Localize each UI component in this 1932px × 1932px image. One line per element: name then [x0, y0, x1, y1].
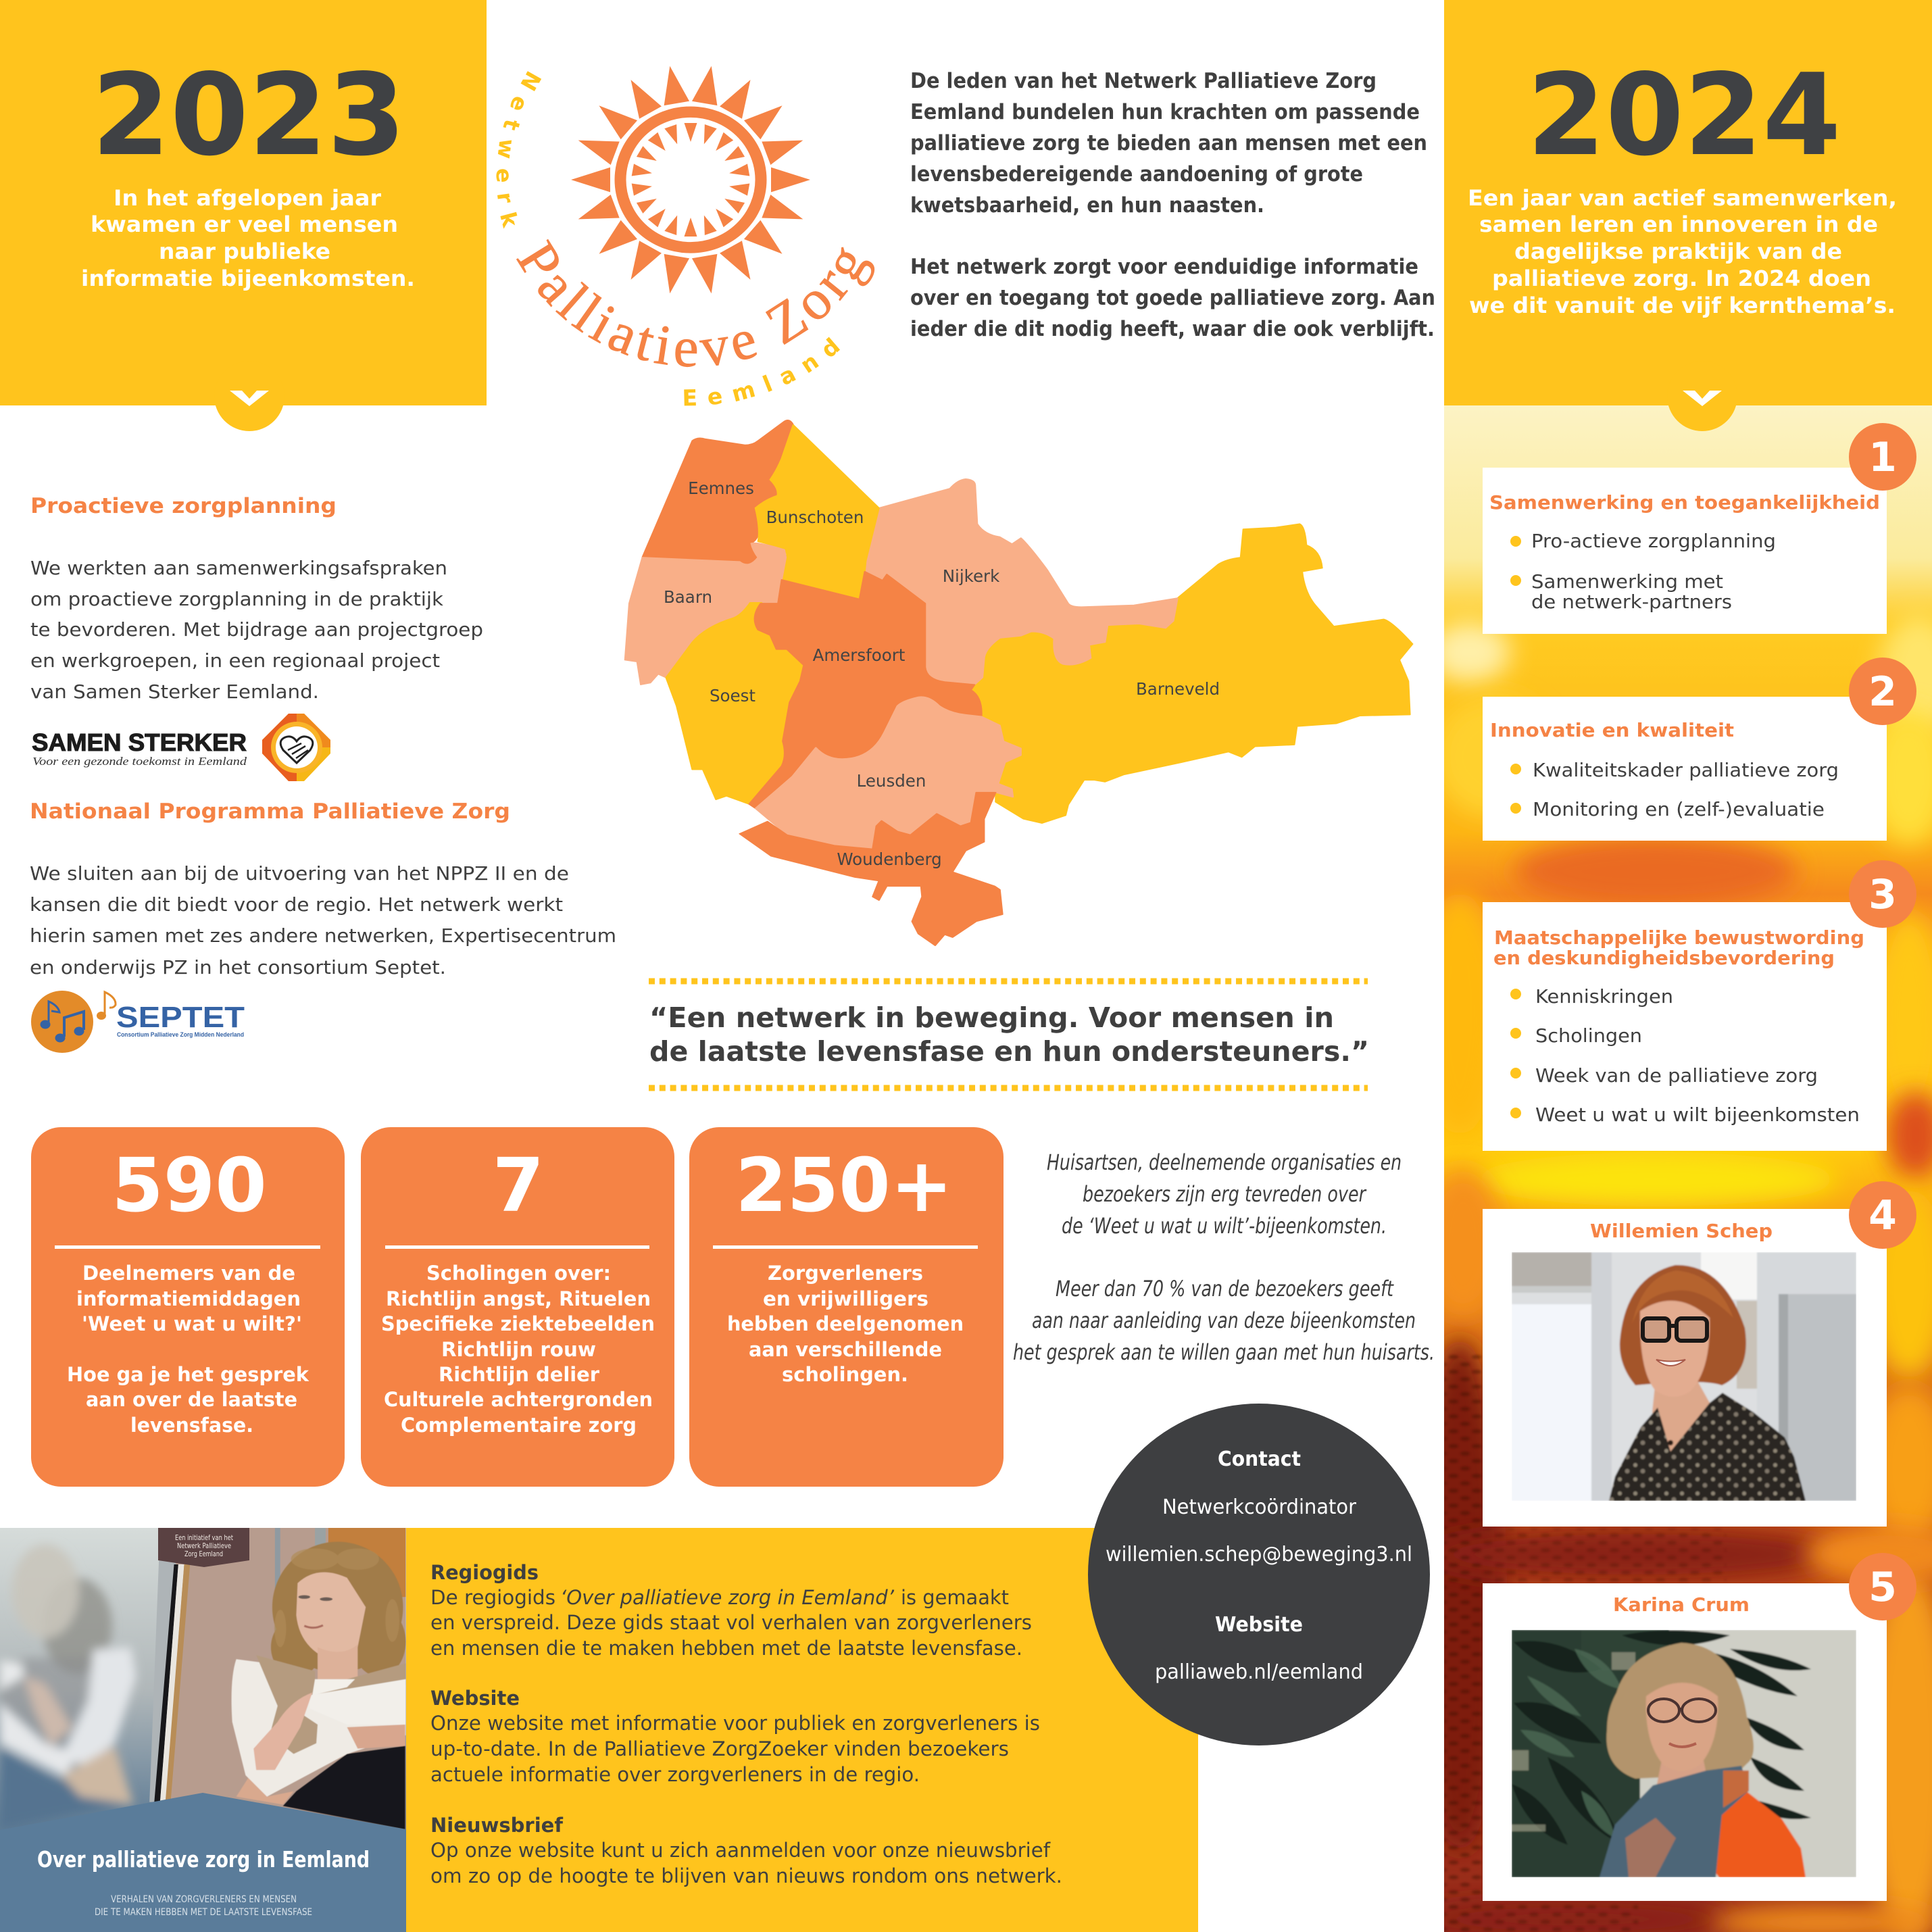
- municipality: Eemnes: [643, 420, 793, 569]
- card 5: Karina Crum: [1483, 1583, 1887, 1901]
- text: NPPZ paragraph: [30, 862, 616, 979]
- text: stat 250+ description: Zorgverleners: [768, 1262, 923, 1285]
- text: Website: Onze website met informatie voor publiek en zorgverleners is: [430, 1712, 1040, 1735]
- text: Website: [430, 1687, 1040, 1786]
- text: satisfaction statement: de ‘Weet u wat u wilt’-bijeenkomsten.: [1062, 1213, 1387, 1239]
- map labels: Eemnes: [688, 478, 754, 498]
- text: 2023 intro: informatie bijeenkomsten.: [81, 266, 415, 291]
- text: Regiogids: [430, 1561, 1032, 1660]
- text: 2023 intro: [81, 185, 415, 291]
- logo text: Netwerk: Netwerk: [496, 71, 542, 228]
- icon: sun: [571, 64, 810, 295]
- text: Nieuwsbrief: om zo op de hoogte te blijven van nieuws rondom ons netwerk.: [430, 1864, 1062, 1887]
- card 3: Maatschappelijke bewustwording: Maatschappelijke bewustwording: [1494, 926, 1864, 949]
- text: 2024 intro: dagelijkse praktijk van de: [1514, 239, 1842, 264]
- scarf: [1600, 1766, 1749, 1877]
- text: stat 590 description: levensfase.: [130, 1414, 253, 1437]
- card 3: Maatschappelijke bewustwording: Kenniskringen: [1535, 985, 1673, 1008]
- text: proactieve zorgplanning paragraph: [30, 557, 483, 703]
- shirt: [1609, 1393, 1806, 1501]
- badge 4: 4: [1868, 1192, 1897, 1239]
- photo: Karina Crum: [1512, 1630, 1856, 1877]
- card 5: Karina Crum: Karina Crum: [1613, 1593, 1750, 1616]
- text: satisfaction statement: het gesprek aan te willen gaan met hun huisarts.: [1013, 1339, 1435, 1365]
- text: Nieuwsbrief: [430, 1814, 1062, 1887]
- badge 3: [1849, 860, 1916, 928]
- text: stat 7 description: Specifieke ziektebeelden: [381, 1312, 655, 1335]
- text: 2024 intro: we dit vanuit de vijf kernthema’s.: [1469, 293, 1896, 318]
- municipality: Barneveld: [971, 524, 1412, 823]
- text: NPPZ paragraph: hierin samen met zes andere netwerken, Expertisecentrum: [30, 924, 616, 947]
- banner: brown tag: Zorg Eemland: [184, 1550, 223, 1558]
- logo text: Eemland: Eemland: [684, 337, 840, 405]
- text: stat 250+ description: en vrijwilligers: [763, 1287, 928, 1310]
- number: 590: 590: [112, 1142, 267, 1229]
- panel: contact circle: Netwerkcoördinator: [1162, 1495, 1357, 1519]
- number: 7: 7: [493, 1142, 544, 1229]
- logo: Samen Sterker: [32, 714, 330, 781]
- logo: Septet: Consortium Palliatieve Zorg Midden Nederland: [117, 1031, 244, 1038]
- card 2: Innovatie en kwaliteit: Innovatie en kwaliteit: [1490, 719, 1734, 741]
- logo: Samen Sterker: SAMEN STERKER: [32, 728, 247, 756]
- text: stat 250+ description: hebben deelgenomen: [727, 1312, 964, 1335]
- text: 2023 intro: kwamen er veel mensen: [91, 212, 398, 237]
- badge 1: 1: [1868, 434, 1897, 481]
- card 3: Maatschappelijke bewustwording: Scholingen: [1535, 1024, 1642, 1047]
- text: proactieve zorgplanning paragraph: en werkgroepen, in een regionaal project: [30, 649, 440, 672]
- text: stat 590 description: Deelnemers van de: [82, 1262, 295, 1285]
- reflection: [0, 1544, 136, 1829]
- smile: [1656, 1360, 1685, 1366]
- text: NPPZ paragraph: kansen die dit biedt voor de regio. Het netwerk werkt: [30, 893, 563, 916]
- icon: chevron down 2024: [1683, 391, 1722, 406]
- map labels: Soest: [710, 686, 756, 705]
- eyes: [299, 1595, 310, 1599]
- panel: right column flower photo background: [1412, 405, 1932, 1932]
- card 3: Maatschappelijke bewustwording: [1483, 902, 1887, 1151]
- panel: stat 7: [361, 1127, 674, 1487]
- text: stat 590 description: Hoe ga je het gesprek: [67, 1363, 309, 1386]
- face: [1640, 1301, 1710, 1397]
- text: stat 590 description: aan over de laatste: [86, 1388, 297, 1411]
- badge 5: 5: [1868, 1564, 1897, 1611]
- text: stat 7 description: Culturele achtergronden: [384, 1388, 653, 1411]
- logo text: Palliatieve Zorg: Palliatieve Zorg: [516, 239, 874, 368]
- municipality: Baarn: [625, 543, 786, 685]
- map labels: Bunschoten: [766, 507, 864, 527]
- card 1: Samenwerking en toegankelijkheid: [1483, 468, 1887, 634]
- text: satisfaction statement: Huisartsen, deelnemende organisaties en: [1047, 1149, 1402, 1175]
- text: satisfaction statement: [1013, 1149, 1435, 1365]
- text: network introduction: over en toegang tot goede palliatieve zorg. Aan: [910, 286, 1435, 310]
- text: 2023 intro: naar publieke: [159, 239, 330, 264]
- panel: 2024 header: [1444, 0, 1932, 431]
- text: Regiogids: is gemaakt: [901, 1586, 1009, 1609]
- hair: [1620, 1265, 1746, 1385]
- text: network introduction: kwetsbaarheid, en hun naasten.: [910, 193, 1264, 218]
- text: stat 7 description: Complementaire zorg: [401, 1414, 637, 1437]
- logo: Samen Sterker: Voor een gezonde toekomst in Eemland: [32, 755, 247, 768]
- banner: blue title block: Over palliatieve zorg in Eemland: [37, 1846, 370, 1873]
- heading: 2023: 2023: [92, 50, 405, 181]
- hair: [1606, 1643, 1754, 1779]
- text: proactieve zorgplanning paragraph: We werkten aan samenwerkingsafspraken: [30, 557, 447, 579]
- municipality: Soest: [666, 603, 803, 804]
- text: NPPZ paragraph: en onderwijs PZ in het consortium Septet.: [30, 956, 446, 979]
- badge 1: [1849, 423, 1916, 491]
- panel: communication channels: [405, 1528, 1198, 1932]
- card 3: Maatschappelijke bewustwording: en deskundigheidsbevordering: [1493, 947, 1835, 969]
- number: 250+: 250+: [735, 1142, 953, 1229]
- text: stat 7 description: Scholingen over:: [426, 1262, 611, 1285]
- wall behind window: [171, 1528, 405, 1829]
- heading: 2024: 2024: [1527, 50, 1841, 181]
- text: NPPZ paragraph: We sluiten aan bij de uitvoering van het NPPZ II en de: [30, 862, 569, 885]
- sweater: [1659, 1792, 1806, 1877]
- necklace: [1668, 1440, 1673, 1445]
- municipality: Bunschoten: [756, 425, 879, 599]
- text: stat 590 description: 'Weet u wat u wilt?': [82, 1312, 302, 1335]
- text: network introduction: De leden van het Netwerk Palliatieve Zorg: [910, 69, 1377, 93]
- panel: contact circle: palliaweb.nl/eemland: [1155, 1660, 1363, 1684]
- text: satisfaction statement: bezoekers zijn erg tevreden over: [1083, 1181, 1366, 1207]
- glasses: [1643, 1318, 1707, 1341]
- card 4: Willemien Schep: [1483, 1209, 1887, 1527]
- map labels: Barneveld: [1136, 679, 1220, 699]
- badge 2: 2: [1868, 668, 1897, 716]
- banner: blue title block: [38, 1793, 405, 1915]
- text: network introduction: Eemland bundelen hun krachten om passende: [910, 100, 1420, 124]
- card 3: Maatschappelijke bewustwording: Weet u wat u wilt bijeenkomsten: [1535, 1104, 1860, 1126]
- text: Regiogids: ‘Over palliatieve zorg in Eemland’: [560, 1586, 895, 1609]
- text: stat 590 description: informatiemiddagen: [76, 1287, 301, 1310]
- panel: 2023 header: [0, 0, 487, 431]
- text: stat 7 description: Richtlijn rouw: [441, 1338, 596, 1361]
- text: Nieuwsbrief: Nieuwsbrief: [430, 1814, 563, 1837]
- municipality: Leusden: [756, 697, 1021, 849]
- text: 2024 intro: palliatieve zorg. In 2024 doen: [1492, 266, 1871, 291]
- map labels: Baarn: [664, 587, 712, 607]
- map labels: Leusden: [857, 771, 926, 791]
- map labels: Amersfoort: [813, 645, 906, 665]
- text: Regiogids: De regiogids: [430, 1586, 555, 1609]
- glasses: [1648, 1699, 1716, 1722]
- heading: Nationaal Programma Palliatieve Zorg: Nationaal Programma Palliatieve Zorg: [30, 799, 510, 824]
- woman portrait on cover: [232, 1541, 405, 1829]
- text: network introduction: ieder die dit nodig heeft, waar die ook verblijft.: [910, 317, 1435, 341]
- icon: handshake heart emblem: [262, 714, 330, 781]
- badge 4: [1849, 1181, 1916, 1249]
- text: stat 590 description: [67, 1262, 309, 1437]
- banner: brown tag: Netwerk Palliatieve: [177, 1541, 231, 1550]
- text: network introduction: Het netwerk zorgt voor eenduidige informatie: [910, 255, 1418, 279]
- text: stat 7 description: Richtlijn angst, Rituelen: [386, 1287, 651, 1310]
- map labels: Woudenberg: [837, 849, 942, 869]
- icon: chevron down 2023: [230, 391, 269, 406]
- text: proactieve zorgplanning paragraph: van Samen Sterker Eemland.: [30, 680, 319, 703]
- panel: contact circle: Website: [1215, 1613, 1303, 1637]
- text: proactieve zorgplanning paragraph: om proactieve zorgplanning in de praktijk: [30, 588, 444, 610]
- text: Regiogids: Regiogids: [430, 1561, 539, 1584]
- text: satisfaction statement: aan naar aanleiding van deze bijeenkomsten: [1032, 1308, 1416, 1333]
- banner: blue title block: VERHALEN VAN ZORGVERLENERS EN MENSEN: [111, 1894, 297, 1905]
- text: Regiogids: en mensen die te maken hebben met de laatste levensfase.: [430, 1637, 1022, 1660]
- map: municipalities of Eemland: [625, 420, 1412, 945]
- badge 3: 3: [1868, 871, 1897, 918]
- badge 2: [1849, 658, 1916, 725]
- card 1: Samenwerking en toegankelijkheid: Pro-actieve zorgplanning: [1531, 530, 1776, 552]
- text: Regiogids: en verspreid. Deze gids staat vol verhalen van zorgverleners: [430, 1611, 1032, 1634]
- text: proactieve zorgplanning paragraph: te bevorderen. Met bijdrage aan projectgroep: [30, 618, 483, 641]
- logo: Septet: SEPTET: [116, 1001, 245, 1034]
- text: stat 250+ description: [727, 1262, 964, 1386]
- text: Nieuwsbrief: Op onze website kunt u zich aanmelden voor onze nieuwsbrief: [430, 1839, 1051, 1862]
- card 1: Samenwerking en toegankelijkheid: Samenwerking en toegankelijkheid: [1489, 491, 1880, 514]
- card 3: Maatschappelijke bewustwording: Week van de palliatieve zorg: [1535, 1064, 1818, 1087]
- neck: [1656, 1757, 1710, 1791]
- callout: quote: “Een netwerk in beweging. Voor mensen in: [649, 1001, 1334, 1034]
- badge 5: [1849, 1553, 1916, 1620]
- municipality: Amersfoort: [749, 572, 982, 808]
- neck: [1652, 1379, 1710, 1453]
- text: Website: actuele informatie over zorgverleners in de regio.: [430, 1763, 920, 1786]
- card 2: Innovatie en kwaliteit: Kwaliteitskader palliatieve zorg: [1533, 759, 1839, 781]
- panel: contact circle: [1088, 1404, 1430, 1745]
- text: 2023 intro: In het afgelopen jaar: [114, 185, 381, 211]
- text: stat 7 description: [381, 1262, 655, 1437]
- card 1: Samenwerking en toegankelijkheid: de netwerk-partners: [1531, 591, 1732, 613]
- panel: contact circle: Contact: [1218, 1447, 1301, 1471]
- face: [1646, 1683, 1718, 1771]
- heading: Proactieve zorgplanning: Proactieve zorgplanning: [30, 494, 337, 518]
- logo: Septet: [31, 991, 245, 1053]
- map labels: [664, 478, 1220, 869]
- text: network introduction: [910, 69, 1435, 341]
- text: Website: up-to-date. In de Palliatieve ZorgZoeker vinden bezoekers: [430, 1737, 1009, 1760]
- image: regiogids cover: [0, 1528, 406, 1932]
- card 1: Samenwerking en toegankelijkheid: Samenwerking met: [1531, 570, 1723, 593]
- text: 2024 intro: samen leren en innoveren in de: [1479, 212, 1878, 237]
- text: stat 250+ description: scholingen.: [782, 1363, 908, 1386]
- text: network introduction: levensbedereigende aandoening of grote: [910, 162, 1363, 187]
- text: Website: Website: [430, 1687, 520, 1710]
- municipality: Nijkerk: [865, 479, 1178, 685]
- card 2: Innovatie en kwaliteit: [1483, 697, 1887, 841]
- card 2: Innovatie en kwaliteit: Monitoring en (zelf-)evaluatie: [1533, 798, 1825, 820]
- banner: blue title block: DIE TE MAKEN HEBBEN MET DE LAATSTE LEVENSFASE: [95, 1907, 312, 1918]
- banner: brown tag: [158, 1528, 249, 1567]
- photo: Willemien Schep: [1512, 1252, 1856, 1501]
- text: stat 7 description: Richtlijn delier: [439, 1363, 600, 1386]
- callout: quote: de laatste levensfase en hun ondersteuners.”: [649, 1035, 1369, 1068]
- text: 2024 intro: Een jaar van actief samenwerken,: [1468, 185, 1897, 211]
- banner: brown tag: Een initiatief van het: [175, 1533, 234, 1542]
- callout: quote: [649, 981, 1369, 1088]
- text: satisfaction statement: Meer dan 70 % van de bezoekers geeft: [1056, 1276, 1394, 1302]
- window frame: [149, 1560, 176, 1802]
- text: 2024 intro: [1468, 185, 1897, 318]
- logo: Netwerk Palliatieve Zorg Eemland: [496, 66, 874, 405]
- panel: stat 590: [31, 1127, 345, 1487]
- text: network introduction: palliatieve zorg te bieden aan mensen met een: [910, 131, 1427, 155]
- text: stat 250+ description: aan verschillende: [749, 1338, 942, 1361]
- card 4: Willemien Schep: Willemien Schep: [1590, 1220, 1773, 1242]
- municipality: Woudenberg: [739, 793, 1003, 945]
- map labels: Nijkerk: [943, 566, 1000, 586]
- panel: contact circle: willemien.schep@beweging3.nl: [1106, 1543, 1412, 1566]
- panel: stat 250+: [689, 1127, 1004, 1487]
